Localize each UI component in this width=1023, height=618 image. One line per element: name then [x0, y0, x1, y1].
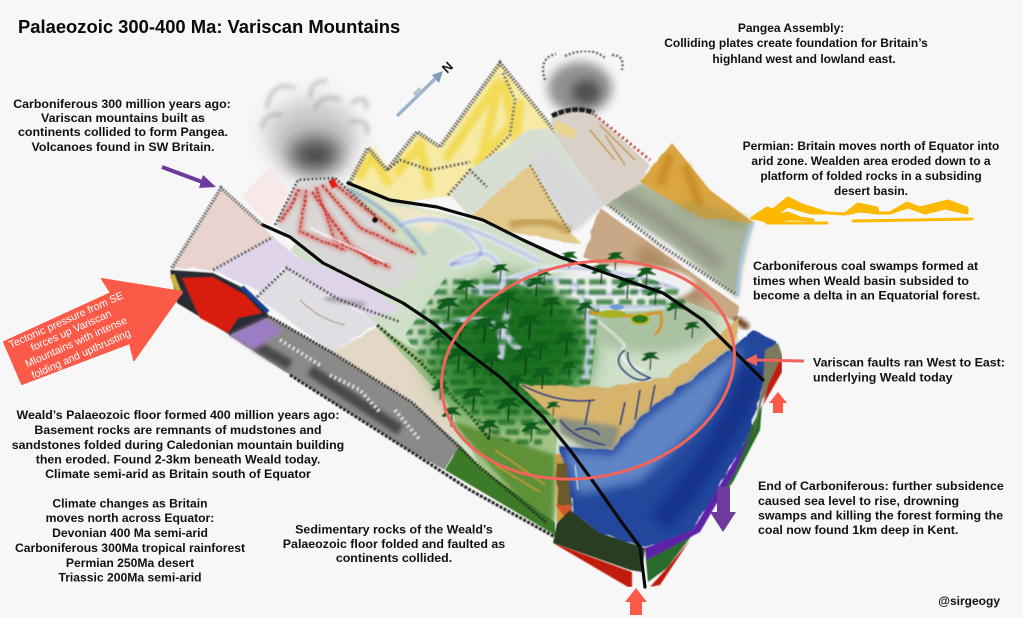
- small red uplift arrow east: [769, 392, 787, 413]
- north arrow: N: [439, 59, 456, 76]
- western Variscan fault: [263, 225, 645, 587]
- eye-shaped swamp lake: [590, 304, 662, 335]
- text: climate changes: Triassic 200Ma semi-arid: [58, 570, 202, 584]
- green plain: [377, 325, 557, 525]
- text: Variscan faults: [813, 356, 1005, 384]
- text: Variscan faults: underlying Weald today: [813, 370, 953, 384]
- southern rock edge: [228, 317, 555, 537]
- text: sedimentary rocks: continents collided.: [336, 551, 452, 565]
- red arrow pointing at fault: [745, 354, 804, 366]
- text: End of Carboniferous: End of Carboniferous: further subsidence: [758, 479, 1004, 493]
- text: End of Carboniferous: swamps and killing the forest forming the: [758, 508, 1003, 522]
- eastern Variscan fault: [348, 183, 763, 380]
- text: sedimentary rocks: [283, 522, 505, 565]
- text: Carboniferous 300 million years ago: Carboniferous 300 million years ago:: [13, 97, 231, 111]
- text: Weald's Palaeozoic floor: sandstones folded during Caledonian mountain building: [12, 438, 344, 452]
- text: coal swamps: become a delta in an Equatorial forest.: [753, 288, 980, 302]
- purple subsidence arrow: [710, 487, 736, 532]
- red volcano: [275, 178, 420, 290]
- text: coal swamps: times when Weald basin subsided to: [753, 274, 969, 288]
- text: End of Carboniferous: coal now found 1km deep in Kent.: [758, 523, 958, 537]
- arrow caption: [7, 290, 133, 382]
- big red tectonic pressure arrow: [4, 279, 182, 384]
- text: Permian: platform of folded rocks in a subsiding: [760, 169, 982, 183]
- swamp forest trees: [430, 252, 700, 442]
- brown slope: [583, 208, 748, 328]
- pale pink mountain: [241, 167, 290, 225]
- arrow caption: Tectonic pressure from SE: [7, 290, 125, 351]
- text: Pangea Assembly: Colliding plates create foundation for Britain’s: [664, 36, 928, 50]
- text: Weald's Palaeozoic floor: Basement rocks are remnants of mudstones and: [34, 423, 322, 437]
- block diagram landscape: [170, 51, 782, 587]
- text: coal swamps: [753, 259, 980, 302]
- pink mountain: [172, 188, 273, 270]
- pale grey-green mountain: [448, 128, 606, 232]
- text: climate changes: moves north across Equator:: [46, 511, 214, 525]
- text: Carboniferous 300 million years ago: continents collided to form Pangea.: [18, 125, 228, 139]
- swamp forest canopy texture: [400, 282, 720, 442]
- text: climate changes: Permian 250Ma desert: [66, 556, 194, 570]
- text: Carboniferous 300 million years ago: Variscan mountains built as: [41, 111, 205, 125]
- text: Variscan faults: Variscan faults ran West to East:: [813, 356, 1005, 370]
- fault lines: [263, 183, 763, 587]
- north arrow: [397, 59, 456, 116]
- text: sedimentary rocks: Sedimentary rocks of the Weald’s: [295, 522, 493, 536]
- red folded basement rocks: [170, 270, 282, 350]
- text: climate changes: [15, 496, 245, 584]
- title: Palaeozoic 300-400 Ma: Variscan Mountains: [18, 16, 400, 37]
- red uplift arrow south: [625, 588, 647, 615]
- credit: @sirgeogy: [938, 594, 1000, 608]
- text: End of Carboniferous: caused sea level to rise, drowning: [758, 494, 959, 508]
- purple arrow to volcanoes: [162, 167, 216, 188]
- yellow desert mountain sketch: [752, 198, 972, 223]
- coastal cliff strip: [556, 462, 580, 528]
- eastern volcano cone: [550, 110, 650, 205]
- main land surface: [290, 183, 740, 525]
- text: Weald's Palaeozoic floor: then eroded. Found 2-3km beneath Weald today.: [36, 452, 320, 466]
- text: coal swamps: Carboniferous coal swamps formed at: [753, 259, 978, 273]
- orange mountain: [640, 143, 753, 225]
- yellow mountains: [350, 63, 552, 205]
- forest floor in coal swamp: [428, 265, 715, 422]
- text: Pangea Assembly: Pangea Assembly:: [738, 21, 844, 35]
- beach and delta: [520, 317, 740, 522]
- arrow caption: folding and upthrusting: [30, 327, 133, 382]
- tan mountain: [470, 165, 583, 245]
- text: Pangea Assembly: [664, 21, 928, 66]
- arrow caption: Mlountains with intense: [23, 315, 129, 370]
- text: End of Carboniferous: [758, 479, 1004, 537]
- text: sedimentary rocks: Palaeozoic floor folded and faulted as: [283, 537, 505, 551]
- text: Permian: [743, 139, 999, 198]
- text: Permian: Permian: Britain moves north of Equator into: [743, 139, 999, 153]
- grey-green eastern ridge band: [552, 128, 753, 298]
- sea: [560, 330, 777, 548]
- volcano smoke: eastern volcano: [543, 51, 623, 114]
- block side: southeast face: [645, 343, 782, 587]
- text: climate changes: Devonian 400 Ma semi-arid: [52, 526, 208, 540]
- text: Weald's Palaeozoic floor: Climate semi-arid as Britain south of Equator: [45, 467, 311, 481]
- text: Weald's Palaeozoic floor: [12, 408, 344, 481]
- river systems: [350, 190, 680, 380]
- text: Carboniferous 300 million years ago: [13, 97, 231, 154]
- block side: southwest face: [553, 510, 645, 587]
- beige slope: [333, 327, 455, 440]
- text: Permian: desert basin.: [834, 184, 908, 198]
- volcano smoke: western volcano: [262, 81, 367, 173]
- arrow caption: forces up Variscan: [29, 308, 113, 354]
- text: Carboniferous 300 million years ago: Volcanoes found in SW Britain.: [32, 140, 214, 154]
- lilac mountain slopes: [213, 237, 400, 353]
- text: Pangea Assembly: highland west and lowland east.: [712, 52, 896, 66]
- red ellipse: coal swamp focus: [421, 235, 755, 505]
- text: climate changes: Climate changes as Britain: [52, 496, 208, 510]
- text: Weald's Palaeozoic floor: Weald’s Palaeozoic floor formed 400 million years ago:: [17, 408, 339, 422]
- text: climate changes: Carboniferous 300Ma tropical rainforest: [15, 541, 245, 555]
- text: Permian: arid zone. Wealden area eroded down to a: [751, 154, 991, 168]
